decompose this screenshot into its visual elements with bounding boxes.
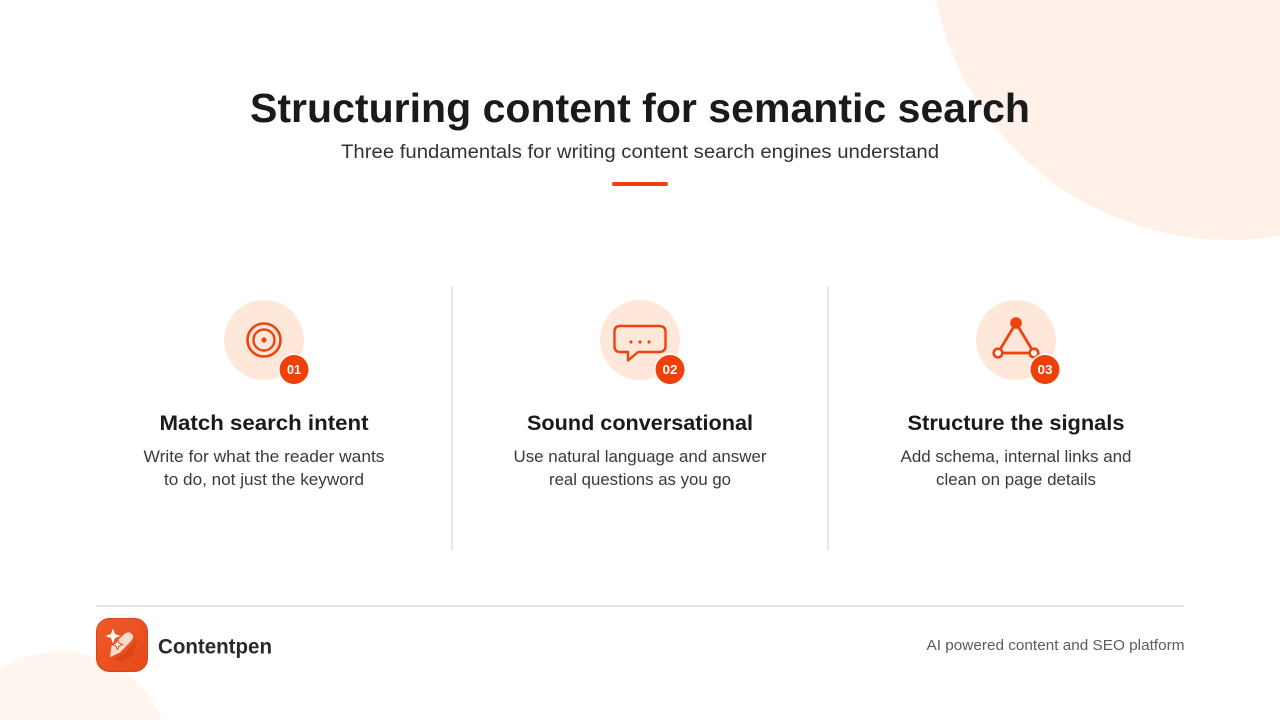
description: structure the signals: Add schema, internal links and [900,448,1132,466]
logo: Contentpen [96,618,272,672]
description: sound conversational [514,448,767,489]
decorative circle: top right [936,0,1280,240]
heading: structure the signals: Structure the signals [908,412,1124,435]
badge: 03 [1029,354,1061,386]
panel: match search intent [144,300,384,489]
icon: pen with sparkles [96,618,148,672]
icon: target [224,300,304,380]
badge: 03: 03 [1038,363,1053,377]
badge: 02 [654,354,686,386]
description: match search intent: to do, not just the keyword [164,471,364,489]
description: sound conversational: real questions as you go [549,471,731,489]
subtitle: Three fundamentals for writing content search engines understand [341,142,939,163]
wordmark: Contentpen [158,634,272,658]
description: structure the signals: clean on page details [936,471,1096,489]
description: match search intent: Write for what the reader wants [144,448,384,466]
decorative circle: bottom left [0,651,162,720]
description: structure the signals [900,448,1132,489]
panel: structure the signals [900,300,1132,489]
icon: speech bubble [600,300,680,380]
heading: match search intent: Match search intent [160,412,369,435]
badge: 01: 01 [287,363,301,377]
title: Structuring content for semantic search [250,85,1030,131]
badge: 01 [278,354,310,386]
accent rule [612,182,668,186]
badge: 02: 02 [662,363,678,377]
description: sound conversational: Use natural language and answer [514,448,767,466]
tagline: AI powered content and SEO platform [926,637,1184,654]
description: match search intent [144,448,384,489]
icon: connected triangle [976,300,1056,380]
panel: sound conversational [514,300,767,489]
heading: sound conversational: Sound conversational [527,412,753,435]
